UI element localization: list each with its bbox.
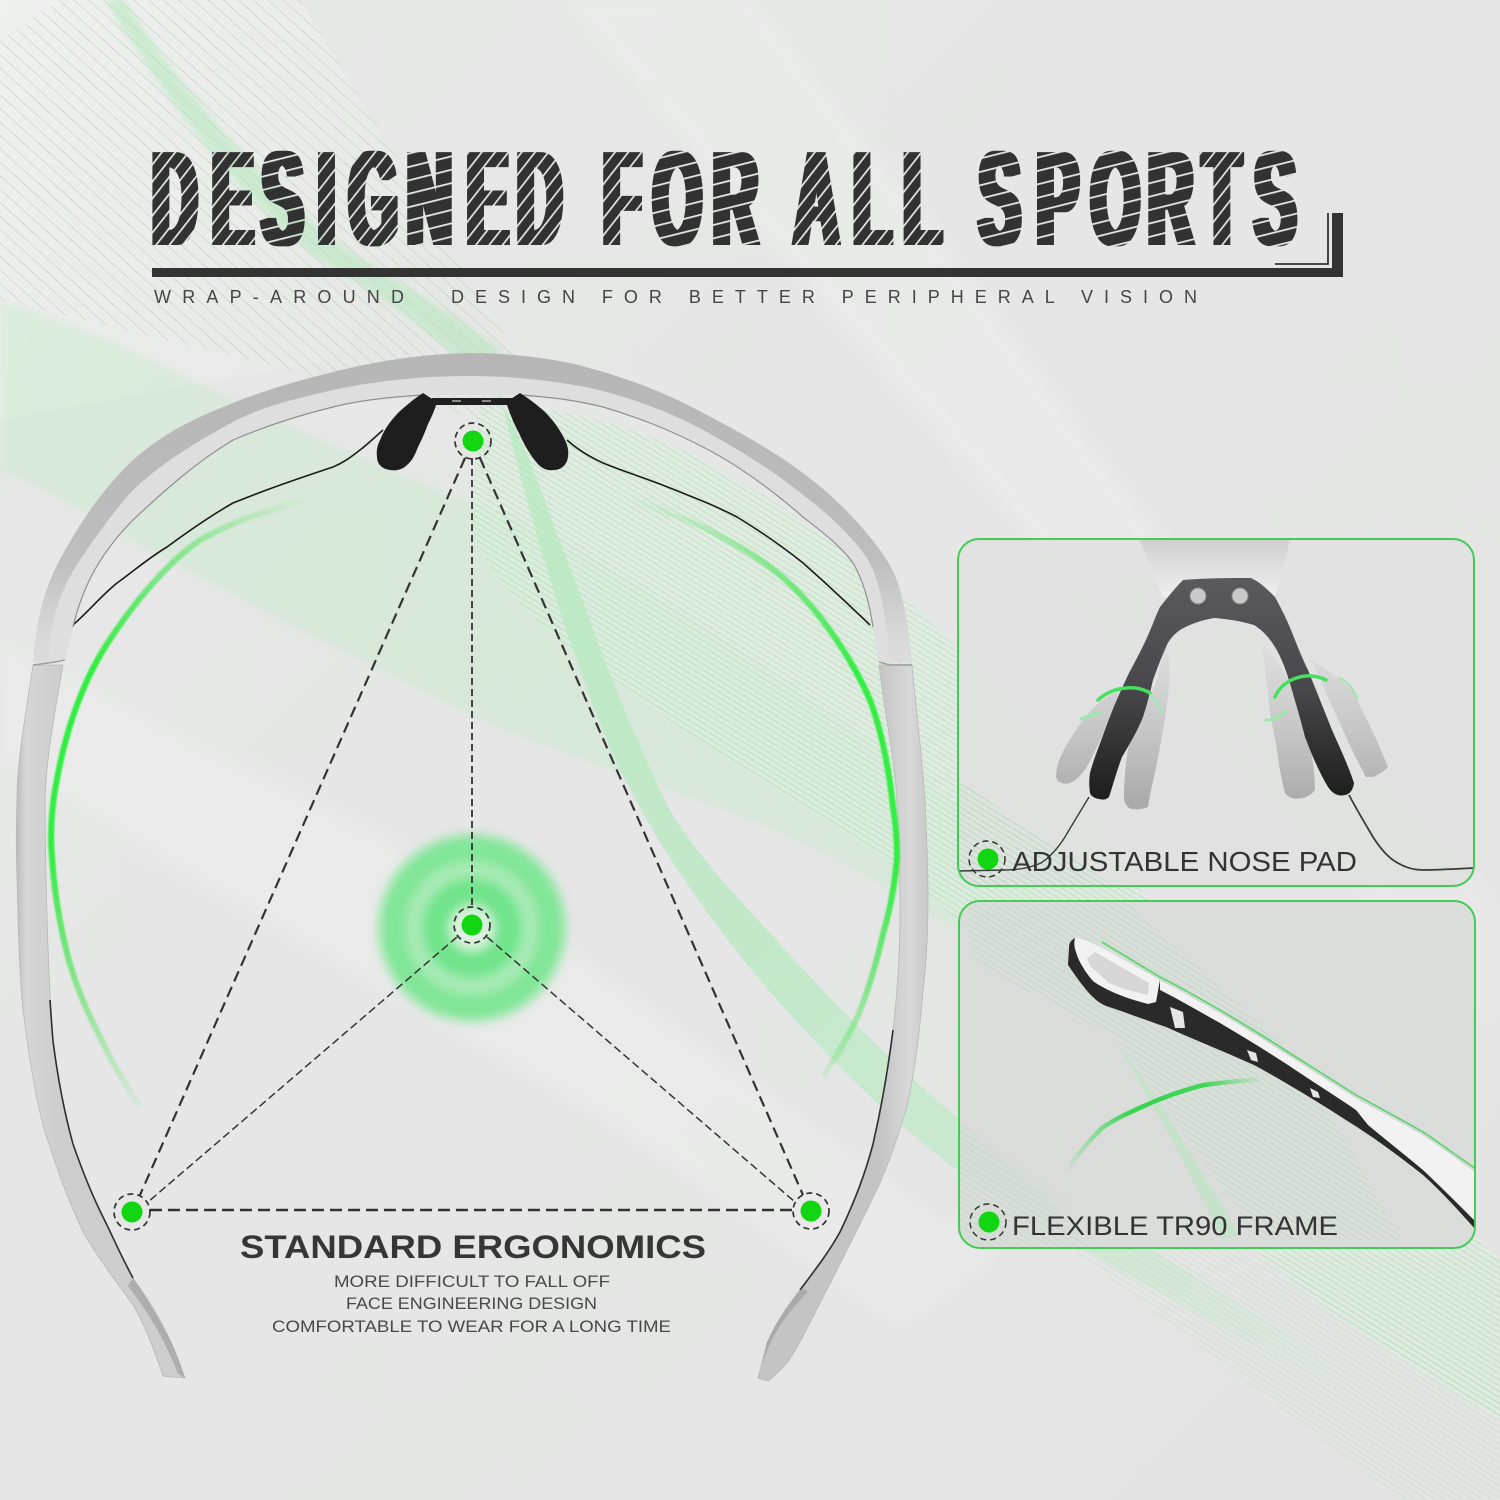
title: FOR <box>603 124 758 275</box>
ergonomics text block <box>240 1229 706 1336</box>
panel 2 border <box>959 901 1475 1248</box>
frame front band <box>33 353 912 663</box>
flex arc <box>1065 1080 1264 1175</box>
panel 2 marker <box>970 1204 1006 1240</box>
title underline bracket <box>152 213 1343 277</box>
panel: flexible tr90 frame <box>959 901 1476 1248</box>
panel 2 background lines <box>968 905 1400 1240</box>
point: left ear <box>114 1194 150 1230</box>
sunglasses frame top view <box>16 353 928 1380</box>
left temple arm <box>16 665 185 1378</box>
point: right ear <box>793 1193 829 1229</box>
ghost pads <box>1056 661 1388 810</box>
nose bridge and pads <box>377 393 568 470</box>
green glow target <box>372 828 572 1028</box>
description lines: MORE DIFFICULT TO FALL OFF <box>334 1272 610 1291</box>
description lines <box>272 1272 671 1336</box>
panel 1 lines at bottom left <box>959 782 1112 885</box>
lens wires <box>958 795 1474 871</box>
heading: STANDARD ERGONOMICS <box>240 1229 706 1265</box>
green fit arc left <box>51 497 313 1106</box>
title: DESIGNED <box>152 124 562 275</box>
flex arcs <box>1081 676 1357 720</box>
description lines: COMFORTABLE TO WEAR FOR A LONG TIME <box>272 1317 671 1336</box>
panel 1 marker <box>969 841 1005 877</box>
panel 2 green band <box>1115 1040 1240 1240</box>
title: ALL <box>794 124 941 275</box>
frame inner shadow line <box>73 395 873 627</box>
hinges <box>33 660 912 665</box>
point: nose <box>455 423 491 459</box>
bridge screws <box>1190 588 1248 604</box>
temple tip loop <box>1074 938 1160 1004</box>
description lines: FACE ENGINEERING DESIGN <box>346 1294 597 1313</box>
title <box>152 150 1298 246</box>
right temple arm <box>758 665 928 1380</box>
lens top <box>1139 539 1290 597</box>
temple green edge <box>1102 942 1476 1169</box>
green fit arc right <box>633 500 897 1076</box>
nose bridge <box>1089 578 1354 800</box>
temple arm <box>1068 938 1476 1230</box>
panel 1 border <box>958 539 1474 886</box>
background ribbon: pale base of striped lines <box>470 405 1500 1420</box>
subtitle: DESIGN FOR BETTER PERIPHERAL VISION <box>451 287 1197 307</box>
background ribbon: faint lower right lines <box>1060 1240 1500 1500</box>
point: centre <box>454 907 490 943</box>
title corner accent <box>1275 213 1328 264</box>
frame inner highlight <box>48 376 890 662</box>
subtitle: WRAP-AROUND <box>154 287 404 307</box>
background ribbon: narrow green band <box>503 407 1400 1420</box>
background ribbon: green wash from left edge <box>0 300 1180 1060</box>
title: SPORTS <box>979 124 1296 275</box>
panel 2 label: FLEXIBLE TR90 FRAME <box>1012 1211 1338 1241</box>
background ribbon: green upper band <box>105 0 505 410</box>
panel 1 label: ADJUSTABLE NOSE PAD <box>1012 846 1357 877</box>
panel: adjustable nose pad <box>958 539 1474 890</box>
title block <box>152 150 1343 303</box>
ergonomics triangle diagram <box>114 423 829 1230</box>
dashed connector lines <box>140 458 803 1210</box>
background ribbon: striped green lines <box>470 405 1500 1420</box>
lens outline <box>73 430 870 625</box>
background ribbon: fine grey lines top left <box>0 0 520 420</box>
